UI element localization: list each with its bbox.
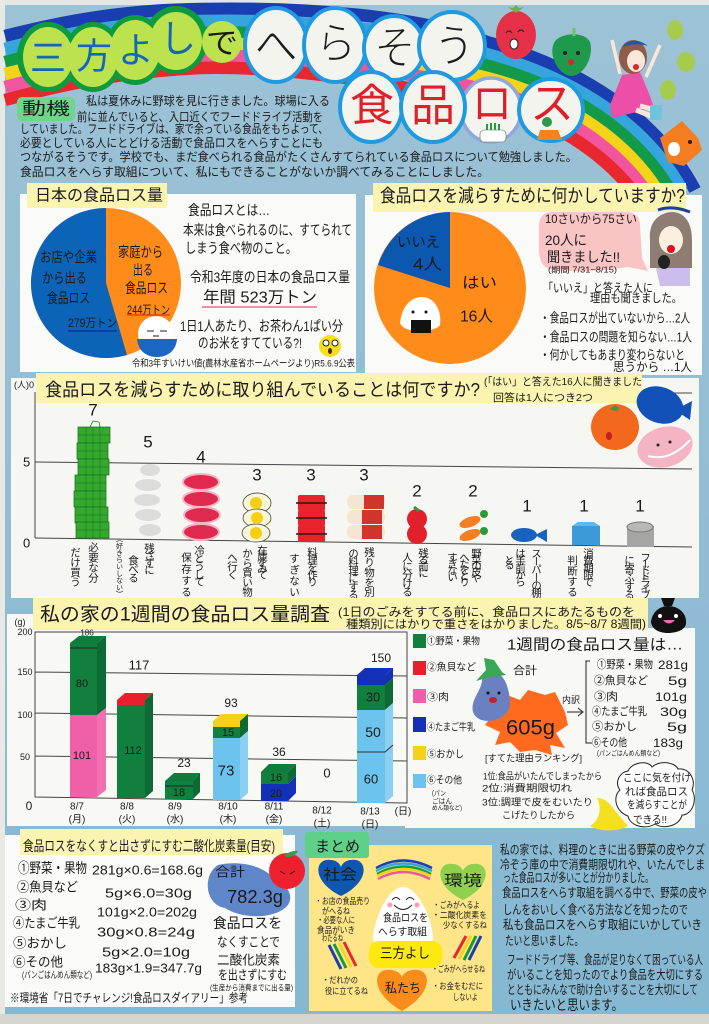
vertical labels: 野菜の皮や: [470, 548, 482, 583]
total blob: 782.3g: [227, 887, 283, 907]
total burst: 合計: [513, 663, 537, 677]
panel: household weekly chart: [7, 598, 695, 830]
bar: eggs: [242, 493, 271, 542]
definition text: のお米をすてている?!: [198, 335, 302, 351]
environment text: ・ごみがへるよ: [433, 900, 480, 910]
bar value labels: 93: [224, 696, 238, 710]
bar value labels: 117: [129, 658, 149, 672]
legend: ④たまご牛乳: [427, 720, 475, 734]
bar value labels: 73: [218, 762, 234, 780]
heart: environment: 環境: [444, 872, 482, 890]
definition text: 1日1人あたり、お茶わん1ぱい分: [180, 318, 343, 334]
reasons text: [540, 280, 692, 374]
discard reasons ranking: 1位:食品がいたんでしまったから: [483, 770, 602, 782]
bar value labels: 30: [366, 690, 380, 704]
title: 食品ロス: 食: [350, 82, 394, 130]
discard reasons ranking: 3位:調理で皮をむいたり: [482, 796, 593, 808]
x axis labels: 8/8: [120, 802, 134, 812]
bar: can: [627, 522, 654, 547]
calculation table: 30g×0.8=24g: [97, 924, 195, 940]
title: へらそう: そ: [374, 22, 416, 74]
icon: banana: [590, 798, 628, 830]
cloud callout: できる!!: [633, 814, 667, 826]
society text: [315, 896, 370, 943]
CO2 message: [210, 915, 293, 992]
heading: 食品ロスをなくすと出さずにすむ二酸化炭素量(目安): [23, 838, 275, 854]
total burst: [485, 663, 568, 755]
heading: 食品ロスを減らすために取り組んでいることは何ですか?: [45, 380, 480, 400]
bar value labels: 186: [80, 628, 94, 638]
x axis labels: 8/7: [70, 802, 84, 812]
CO2 message: を出さずにすむ: [218, 968, 287, 982]
legend: [413, 634, 480, 812]
rainbow top: [376, 860, 432, 879]
calculation table: ③肉: [15, 898, 47, 912]
pie chart: food loss split: 出る: [133, 262, 153, 278]
x axis labels: (金): [266, 812, 282, 826]
legend: ①野菜・果物: [427, 634, 480, 648]
bar value labels: 80: [76, 678, 88, 690]
panel: summary: [305, 832, 492, 1011]
calculation table: [10, 860, 248, 1005]
x axis labels: (月): [69, 814, 85, 826]
bar 8/13: [357, 668, 393, 803]
vertical labels: へ行く: [226, 552, 238, 580]
motive text: 私は夏休みに野球を見に行きました。球場に入る: [86, 93, 330, 108]
breakdown list: 内訳: [562, 694, 580, 705]
title: 食品ロス: [340, 72, 583, 142]
value labels: 3: [252, 466, 262, 484]
bar 8/8: [117, 693, 153, 798]
vertical labels: だけ買う: [69, 547, 81, 587]
reasons text: 理由も聞きました。: [590, 291, 682, 305]
x axis labels: (火): [119, 814, 135, 826]
ourselves text: ・お金をむだに: [432, 981, 483, 991]
x axis labels: 8/9: [168, 802, 182, 812]
calculation table: 5g×6.0=30g: [105, 886, 192, 900]
x axis labels: 8/10: [218, 802, 238, 812]
total burst: 605g: [506, 716, 555, 740]
value labels: 4: [196, 448, 206, 466]
bar value labels: 101: [73, 750, 91, 762]
vertical labels: とる: [503, 555, 515, 570]
calculation table: 183g×1.9=347.7g: [95, 960, 202, 976]
vertical labels: スーパーの棚: [530, 548, 542, 599]
rice ball: へらす取組: [378, 925, 427, 938]
bar value labels: 16: [270, 772, 282, 784]
vertical labels: 冷とうして: [193, 545, 205, 587]
rainbow: [5, 9, 695, 190]
motive text: 必要としている人にとどける活動で食品ロスをへらすことにも: [20, 136, 323, 150]
pie chart: food loss split: 279万トン: [68, 316, 117, 330]
icon: apple: [269, 851, 305, 889]
bar value labels: 0: [323, 766, 331, 780]
bar value labels: 112: [124, 745, 142, 757]
ourselves text: ・だれかの: [322, 975, 358, 985]
vertical labels: へたをとり: [458, 552, 470, 587]
weekly total heading: 1週間の食品ロス量は…: [507, 636, 683, 654]
ourselves text: ・ごみがへらせるね: [432, 964, 485, 974]
motive text: 食品ロスをへらす取組について、私にもできることがないか調べてみることにしました。: [20, 164, 489, 179]
value labels: 2: [468, 482, 478, 500]
value labels: 3: [359, 466, 369, 484]
bar value labels: 150: [371, 651, 391, 665]
environment text: 少なくするね: [443, 920, 487, 930]
vertical labels: 在庫をみて: [256, 545, 268, 580]
x axis labels: (水): [167, 814, 183, 826]
bar: milk carton: [572, 522, 600, 545]
vertical labels: すぎない: [446, 552, 458, 582]
y axis labels: [14, 617, 33, 813]
heading: [36, 373, 642, 404]
y axis labels: 200: [17, 627, 33, 637]
heading tag: まとめ: [315, 838, 360, 856]
axis labels: [14, 380, 34, 550]
definition text: [132, 202, 355, 370]
x axis labels: 8/11: [265, 802, 284, 812]
definition text: 年間 523万トン: [203, 288, 317, 306]
society text: ・お店の食品売り: [315, 896, 370, 906]
pie chart: food loss split: から出る: [42, 270, 87, 286]
calculation table: 5g×2.0=10g: [102, 944, 190, 960]
society text: 食品がいき: [317, 925, 355, 935]
label: 三方よし: 三方よし: [380, 945, 430, 961]
title: 三方よしで: で: [206, 28, 238, 60]
motive text: つながるそうです。学校でも、まだ食べられる食品がたくさんすてられている食品ロスについて勉強しました。: [20, 149, 577, 164]
ourselves text: [322, 964, 485, 1002]
bar 8/7: [70, 636, 106, 797]
bar value labels: 18: [173, 787, 185, 799]
bar value labels: 50: [365, 724, 381, 740]
speech bubble: (期間 7/31~8/15): [548, 266, 617, 274]
title: 三方よしで: 方: [76, 36, 112, 76]
legend: ⑥その他: [427, 774, 462, 786]
pie chart: food loss split: [31, 208, 181, 358]
breakdown list: ②魚貝など: [594, 674, 648, 687]
motive text: [20, 93, 577, 179]
y axis labels: 100: [17, 710, 33, 720]
vertical labels: 残る前に: [417, 547, 429, 578]
title: へらそう: へ: [254, 20, 298, 72]
society text: ・必要な人に: [317, 915, 355, 925]
heading: 種類別にはかりで重さをはかりました。8/5~8/7 8週間): [346, 617, 646, 631]
heading: [27, 183, 167, 208]
cloud callout: れば食品ロス: [625, 786, 688, 798]
x axis labels: (日): [395, 806, 411, 818]
legend: ごはん: [432, 796, 452, 806]
bar: carrots: [458, 510, 488, 543]
environment text: [432, 900, 487, 930]
icon: blue fish: [631, 380, 692, 430]
value labels: 1: [579, 496, 589, 516]
vertical labels: すぎない: [288, 553, 300, 597]
icon: orange pepper: [660, 121, 702, 166]
axis labels: (人)0: [14, 380, 34, 390]
x axis labels: [69, 802, 411, 830]
calculation table: (パンごはんめん類など): [22, 969, 92, 980]
icon: ham: [633, 420, 697, 474]
calculation table: ②魚貝など: [17, 880, 78, 894]
heart: environment: [440, 864, 486, 900]
society text: がへるね: [322, 906, 350, 916]
breakdown list: 281g: [658, 658, 688, 672]
motive label: [17, 97, 75, 121]
rainbow right: [454, 936, 481, 960]
legend: ③肉: [427, 690, 449, 704]
discard reasons ranking: [482, 752, 602, 822]
bar: apples: [407, 507, 427, 544]
panel: CO2: [5, 829, 305, 1007]
pie chart: yes no: [374, 212, 526, 364]
bar value labels: 15: [222, 727, 234, 739]
total blob: [208, 863, 290, 916]
definition text: 令和3年度の日本の食品ロス量: [190, 269, 350, 285]
title: 食品ロス: ロ: [472, 80, 512, 128]
title: 三方よしで: し: [160, 19, 196, 61]
value labels: 1: [522, 496, 532, 516]
heart: society: [318, 860, 364, 896]
bar: fish: [511, 528, 547, 542]
value labels: 5: [143, 432, 153, 452]
bar: green bags: [74, 421, 110, 538]
pie chart: food loss split: 食品ロス: [47, 290, 90, 306]
calculation table: ⑥その他: [13, 954, 63, 970]
heading tag: [305, 832, 369, 858]
heading: [373, 183, 686, 212]
vertical labels: 消費期限で: [582, 547, 594, 587]
bar value labels: 20: [270, 788, 282, 800]
heading: [33, 598, 648, 631]
rice ball: 食品ロスを: [383, 912, 428, 924]
vertical labels: フードドライブ: [639, 552, 651, 600]
CO2 message: 二酸化炭素: [217, 952, 280, 968]
icon: rice bowl: [137, 316, 177, 357]
legend: ⑤おかし: [427, 748, 464, 760]
legend: めん類など): [432, 804, 462, 812]
breakdown list: ③肉: [594, 690, 618, 703]
discard reasons ranking: 2位:消費期限切れ: [482, 782, 573, 794]
heading: 私の家の1週間の食品ロス量調査: [40, 604, 330, 626]
conclusion text: たいと思いました。: [505, 934, 583, 948]
bar 8/10: [213, 714, 248, 800]
reasons text: 思うから …1人: [613, 360, 692, 374]
vertical labels: 残さずに: [143, 542, 155, 575]
title: へらそう: [245, 8, 485, 82]
axis labels: 0: [23, 536, 30, 550]
title: 三方よしで: よ: [118, 30, 154, 70]
rainbow left: [329, 942, 356, 969]
calculation table: ④たまご牛乳: [13, 916, 80, 930]
pie chart: yes no: 16人: [460, 308, 493, 326]
title: 食品ロス: ス: [530, 80, 574, 128]
value labels: 7: [88, 400, 98, 420]
breakdown list: 30g: [660, 705, 687, 719]
y axis labels: 0: [26, 799, 33, 813]
heading: (1日のごみをすてる前に、食品ロスにあたるものを: [338, 604, 635, 619]
breakdown list: 5g: [668, 674, 687, 688]
vertical labels: は手前から: [514, 548, 526, 588]
icon: girl with microphone: [650, 208, 692, 286]
icon: tomato: [496, 5, 536, 59]
vertical labels: 料理を作り: [306, 546, 318, 587]
bar value labels: 60: [364, 772, 378, 786]
breakdown list: 5g: [667, 720, 687, 734]
calculation table: 281g×0.6=168.6g: [92, 862, 203, 878]
total blob: 合計: [215, 864, 245, 880]
title: へらそう: ら: [316, 20, 356, 68]
vertical labels: (好きらいしない): [116, 540, 123, 593]
calculation table: ①野菜・果物: [18, 860, 87, 876]
title: 三方よしで: 三: [30, 38, 66, 78]
x axis labels: (木): [220, 814, 236, 826]
bar value labels: 23: [177, 756, 191, 770]
motive text: 前に並んでいると、入口近くでフードドライブ活動を: [77, 109, 323, 124]
vertical labels: 必要な分: [87, 541, 99, 584]
legend: ②魚貝など: [427, 660, 476, 674]
y axis labels: (g): [14, 617, 26, 627]
bar: leftovers dishes: [347, 495, 385, 539]
axis labels: 5: [23, 454, 30, 470]
title: 食品ロス: 品: [411, 82, 455, 130]
x axis labels: 8/13: [360, 806, 380, 818]
breakdown list: 183g: [653, 736, 683, 750]
value labels: [88, 400, 645, 516]
speech bubble: 10さいから75さい: [545, 212, 637, 226]
breakdown list: (パンごはんめん類など): [597, 748, 660, 758]
heading: (「はい」と答えた16人に聞きました: [484, 375, 642, 388]
speech bubble: 聞きました!!: [547, 249, 620, 265]
CO2 message: なくすことで: [217, 934, 280, 950]
breakdown list: ①野菜・果物: [597, 657, 653, 671]
icon: girl character: [610, 40, 662, 120]
breakdown list: [562, 657, 688, 758]
CO2 message: 食品ロスを: [213, 915, 282, 931]
pie chart: food loss split: 244万トン: [127, 303, 170, 317]
panel: survey: [365, 183, 702, 375]
cloud callout: [616, 763, 694, 827]
icon: rice ball: [400, 297, 440, 333]
value labels: 3: [306, 466, 316, 484]
title: へらそう: う: [434, 20, 474, 72]
y axis labels: 50: [20, 752, 30, 762]
vertical labels: [69, 540, 651, 600]
pie chart: food loss split: 家庭から: [118, 244, 163, 260]
bar 8/11: [261, 764, 296, 801]
icon: green pepper: [552, 28, 591, 76]
pie chart: food loss split: お店や企業: [40, 249, 97, 265]
definition text: しまう食べ物のこと。: [185, 240, 297, 256]
bar value labels: 36: [272, 745, 286, 759]
discard reasons ranking: こげたりしたから: [502, 810, 575, 822]
breakdown list: 101g: [655, 690, 687, 704]
bar: grey leftovers: [134, 464, 161, 536]
breakdown list: ⑤おかし: [592, 720, 637, 733]
vertical labels: 保存する: [180, 551, 192, 597]
icon: orange: [591, 404, 639, 450]
heading: 回答は1人につき2つ: [493, 391, 593, 404]
icon: surprised face: [319, 335, 341, 357]
definition text: 本来は食べられるのに、すてられて: [183, 222, 352, 238]
definition text: 食品ロスとは…: [188, 202, 270, 218]
legend: (パン: [432, 790, 446, 798]
rice ball: [373, 887, 433, 946]
definition text: 令和3年すいけい値(農林水産省ホームページより)R5.6.9公表: [132, 358, 355, 370]
vertical labels: の料理にする: [347, 548, 359, 600]
heading: 日本の食品ロス量: [35, 186, 163, 204]
speech bubble: 20人に: [545, 232, 587, 248]
environment text: ・二酸化炭素を: [432, 910, 487, 920]
conclusion text: いきたいと思います。: [510, 997, 623, 1013]
bar 8/9: [165, 773, 200, 799]
society text: わたるね: [322, 933, 343, 943]
cloud callout: ここに気を付け: [623, 771, 691, 784]
calculation table: ⑤おかし: [13, 936, 67, 950]
icons: small green peas: [660, 20, 695, 100]
vertical labels: 食べる: [127, 555, 139, 583]
pie chart: yes no: はい: [462, 274, 497, 292]
y axis labels: 150: [17, 667, 33, 677]
x axis labels: 8/12: [312, 806, 332, 816]
discard reasons ranking: [すてた理由ランキング]: [485, 752, 582, 764]
panel: efforts bar chart: [11, 373, 699, 600]
x axis labels: (土): [314, 816, 330, 830]
ourselves text: 役に立てるね: [325, 986, 368, 996]
pie chart: yes no: 4人: [413, 256, 442, 274]
label: 三方よし: [369, 941, 442, 968]
speech bubble: [539, 212, 648, 274]
vertical labels: 人に分ける: [401, 552, 413, 597]
heart: ourselves: [377, 970, 427, 1011]
calculation table: 101g×2.0=202g: [97, 904, 197, 920]
vertical labels: に寄ふする: [623, 555, 635, 600]
bar value labels: [73, 628, 391, 800]
grid lines: [35, 393, 692, 547]
icon: eggplant: [473, 658, 510, 721]
breakdown list: ④たまご牛乳: [592, 704, 647, 718]
panel: Japan food loss: [20, 183, 356, 372]
chart frame: [35, 632, 407, 803]
vertical labels: 判断する: [566, 554, 578, 597]
heart: ourselves: 私たち: [385, 980, 421, 996]
heart: society: 社会: [323, 866, 357, 884]
conclusion text: [500, 842, 707, 1013]
reasons text: 「いいえ」と答えた人に: [543, 280, 653, 295]
title: 三方よしで: [17, 6, 242, 92]
breakdown list: ⑥その他: [592, 736, 627, 749]
bar: meat: [183, 474, 220, 540]
ourselves text: しないよ: [453, 992, 478, 1002]
value labels: 1: [635, 496, 645, 516]
CO2 message: (生産から消費までに出る量): [210, 982, 293, 992]
cloud callout: を減らすことが: [627, 798, 687, 811]
pie chart: yes no: いいえ: [397, 234, 440, 250]
motive label: 動機: [22, 100, 70, 118]
pie chart: food loss split: 食品ロス: [125, 280, 168, 296]
x axis labels: (日): [362, 820, 378, 830]
motive text: していました。フードドライブは、家で余っている食品をもちよって、: [20, 121, 328, 136]
vertical labels: から買い物: [241, 548, 253, 598]
vertical labels: 残り物を別: [363, 546, 375, 598]
icon: garbage bag: [651, 598, 686, 633]
heading: [20, 829, 283, 855]
value labels: 2: [412, 482, 422, 500]
calculation table: ※環境省「7日でチャレンジ!食品ロスダイアリー」参考: [10, 990, 248, 1005]
bar: pots: [296, 495, 327, 542]
